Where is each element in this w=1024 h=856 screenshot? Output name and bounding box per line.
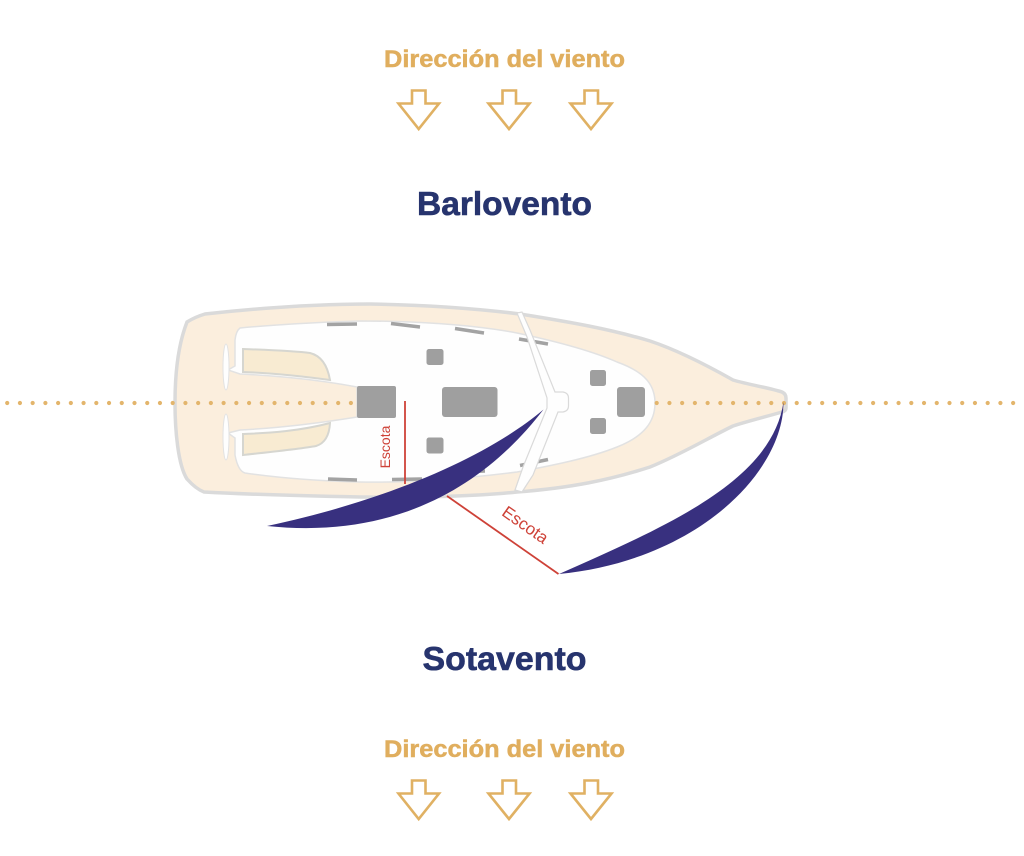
deck tracks: [327, 324, 548, 480]
bench: upper: [243, 349, 330, 380]
heading: Sotavento: Sotavento: [422, 640, 586, 677]
heading: wind direction top: Dirección del viento: [384, 46, 625, 73]
icons: wind arrows top: [398, 90, 612, 129]
label: escota jib: Escota: [498, 502, 552, 548]
heading: wind direction bottom: Dirección del viento: [384, 736, 625, 763]
spreaders and mast: [515, 312, 568, 492]
sail: jib: [559, 402, 784, 574]
bench: lower: [243, 423, 330, 455]
label: escota main: Escota: [377, 425, 393, 468]
centerline dotted: [7, 401, 1020, 405]
wheels: [223, 344, 229, 460]
sheet: main: [404, 401, 406, 484]
hull: [175, 304, 786, 497]
hatches: [357, 349, 645, 454]
icons: wind arrows bottom: [398, 780, 612, 819]
sail: main: [267, 410, 544, 528]
boat: [175, 304, 786, 497]
heading: Barlovento: Barlovento: [417, 185, 592, 222]
deck: [228, 321, 655, 482]
sheet: jib: [447, 496, 558, 574]
